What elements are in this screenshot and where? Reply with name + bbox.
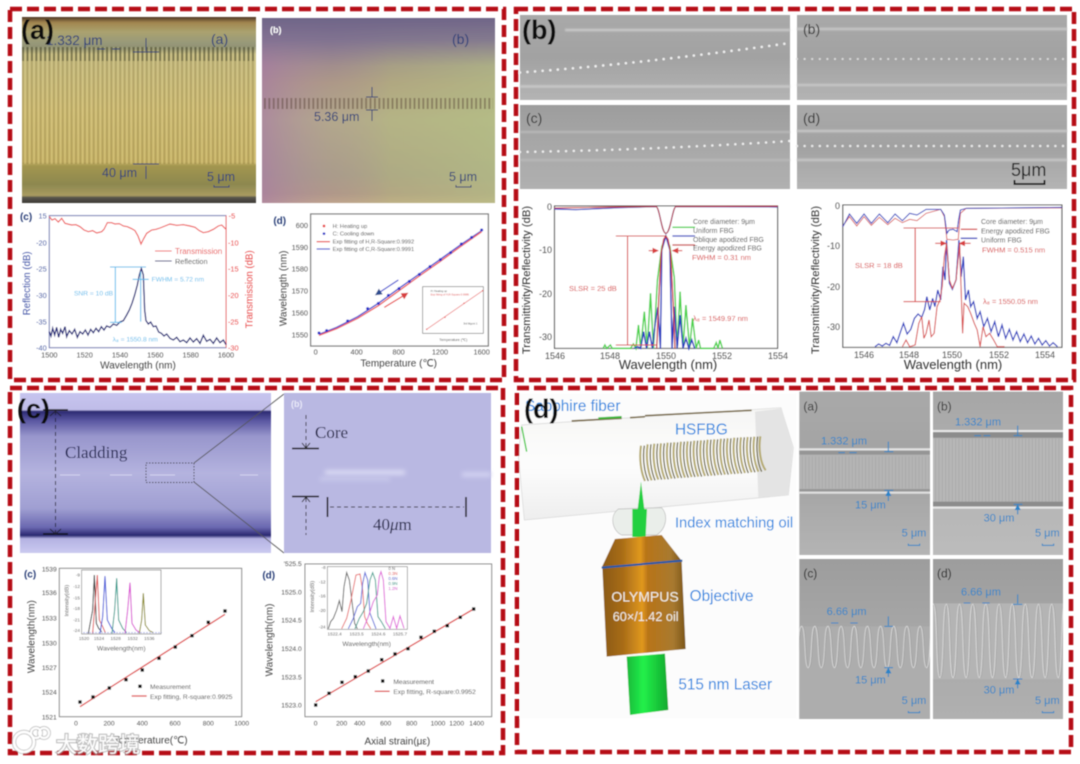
chart: reflection and transmission vs wavelength: 1560	[147, 350, 163, 359]
green focused beam	[632, 482, 647, 537]
chart: apodized FBG spectra, core 9um: Core diameter: 9μm	[693, 219, 755, 226]
chart: reflection and transmission vs wavelength: 1580	[183, 350, 199, 359]
inset: strain spectra: 0.9N	[388, 581, 397, 586]
frame: panel c border	[10, 388, 503, 753]
chart: reflection and transmission vs wavelength: -25	[36, 264, 47, 273]
chart: reflection and transmission vs wavelength: 1500	[41, 350, 57, 359]
SEM: (a) 15 um Type I: 15 μm	[855, 499, 886, 511]
chart: energy apodized vs uniform FBG spectra: 1546	[854, 350, 874, 360]
index matching oil drop	[613, 508, 666, 535]
chart: wavelength vs temperature: 400	[351, 348, 363, 357]
inset: temperature spectra: -15	[73, 595, 80, 600]
chart: wavelength vs temperature with inset: (c)	[24, 569, 36, 580]
inset: temperature spectra: -18	[73, 606, 80, 611]
chart: wavelength vs temperature with inset: 1521	[42, 714, 57, 721]
inset: strain spectra: 1.2N	[388, 586, 397, 591]
inset: strain spectra: 0 N	[388, 566, 395, 571]
chart: apodized FBG spectra, core 9um: 1550	[656, 351, 676, 361]
chart: apodized FBG spectra, core 9um: Transmittivity/Reflectivity (dB)	[521, 206, 533, 354]
chart: energy apodized vs uniform FBG spectra: Core diameter: 9μm	[981, 219, 1043, 226]
micrograph: dots (c): (c)	[526, 110, 542, 126]
chart: wavelength vs axial strain with inset: 600	[380, 721, 392, 728]
diagram: oil-immersion objective writing setup	[518, 393, 797, 718]
SEM: (b) 30 um Type I: (b)	[937, 399, 952, 413]
chart: wavelength vs temperature: Wavelength (nm)	[279, 251, 290, 326]
micrograph: oblique dots	[520, 15, 790, 100]
inset: temperature spectra: -21	[73, 617, 80, 622]
inset: temperature spectra: 1536	[144, 636, 155, 641]
chart: reflection and transmission vs wavelength: 1600	[218, 350, 234, 359]
chart: reflection and transmission vs wavelength: -40	[36, 343, 47, 352]
micrograph: grating 5.36 um: (b)	[452, 31, 469, 47]
chart: wavelength vs temperature: 1590	[292, 243, 308, 252]
frame: panel a border	[10, 9, 504, 380]
chart: reflection and transmission vs wavelength: -20	[228, 291, 239, 300]
chart: energy apodized vs uniform FBG spectra: 1550	[942, 350, 962, 360]
chart: wavelength vs axial strain with inset: Wavelength(nm)	[265, 604, 276, 676]
chart: wavelength vs temperature with inset: Temperature(℃)	[114, 736, 188, 747]
sapphire fiber	[518, 408, 793, 520]
chart: reflection and transmission vs wavelength: Reflection	[175, 257, 208, 266]
chart: energy apodized vs uniform FBG spectra	[810, 201, 1062, 372]
chart: energy apodized vs uniform FBG spectra: Wavelength (nm)	[904, 357, 1002, 372]
micrograph: grating 40 um wide: 40 μm	[102, 166, 137, 180]
chart: wavelength vs temperature with inset: 0	[74, 721, 78, 728]
chart: wavelength vs axial strain with inset: 1400	[469, 721, 484, 728]
inset: strain spectra: -8	[322, 565, 326, 570]
inset: linear fit: H: Heating up	[431, 289, 447, 293]
inset: linear fit: Temperature (℃)	[439, 338, 467, 342]
chart: wavelength vs temperature with inset: 1530	[42, 640, 57, 647]
micrograph: grating 40 um wide	[22, 17, 256, 203]
watermark	[14, 728, 140, 757]
chart: wavelength vs axial strain with inset: '525.5	[284, 561, 302, 568]
setup labels: 515 nm Laser	[678, 677, 772, 694]
inset: strain spectra: -12	[319, 579, 326, 584]
chart: wavelength vs axial strain with inset: 800	[406, 721, 418, 728]
inset: strain spectra: 1525.7	[393, 631, 408, 636]
chart: reflection and transmission vs wavelength: Transmission (dB)	[245, 250, 256, 328]
chart: wavelength vs temperature with inset: 1533	[42, 615, 57, 622]
frame: panel b border	[516, 9, 1074, 380]
chart: wavelength vs axial strain with inset: 1000	[431, 721, 446, 728]
chart: energy apodized vs uniform FBG spectra: -20	[827, 282, 840, 292]
chart: apodized FBG spectra, core 9um: 1546	[545, 351, 565, 361]
chart: wavelength vs axial strain with inset: 400	[354, 721, 366, 728]
chart: wavelength vs temperature: 600	[296, 221, 308, 230]
SEM: (b) 30 um Type I	[933, 392, 1063, 555]
chart: apodized FBG spectra, core 9um: Uniform FBG	[693, 228, 734, 235]
chart: wavelength vs axial strain with inset: 1524.5	[281, 618, 302, 625]
SEM: (a) 15 um Type I: 1.332 μm	[821, 435, 867, 447]
objective: 60×/1.42 oil	[613, 610, 679, 624]
chart: wavelength vs temperature: 1200	[432, 348, 448, 357]
heading: panel a label: (a)	[21, 15, 54, 45]
inset: strain spectra: Wavelength(nm)	[342, 641, 391, 648]
chart: energy apodized vs uniform FBG spectra: 1548	[899, 350, 919, 360]
micrograph: core detail: Core	[315, 423, 348, 442]
SEM: (d) 30 um helical: 5 μm	[1035, 695, 1060, 707]
SEM: (d) 30 um helical: 6.66 μm	[961, 587, 1001, 599]
chart: wavelength vs temperature: Exp fitting of C,R-Square:0.9991	[333, 247, 414, 253]
inset: strain spectra: 0.6N	[388, 576, 397, 581]
inset: linear fit: 3rd Mgcnt 1	[463, 322, 478, 326]
inset: strain spectra: -16	[319, 594, 326, 599]
chart: wavelength vs temperature with inset: 1527	[42, 665, 57, 672]
heading: panel b label: (b)	[522, 15, 556, 45]
chart: reflection and transmission vs wavelength: -10	[228, 238, 239, 247]
chart: wavelength vs axial strain with inset: 1523.0	[281, 703, 302, 710]
chart: wavelength vs temperature with inset: Wavelength(nm)	[26, 600, 37, 673]
SEM: (c) 15 um helical	[799, 559, 930, 719]
setup labels: Sapphire fiber	[525, 398, 620, 415]
inset: temperature spectra: -24	[73, 628, 80, 633]
heading: panel d label: (d)	[524, 394, 558, 424]
chart: reflection and transmission vs wavelength: Wavelength (nm)	[100, 361, 176, 372]
inset: temperature spectra: -12	[73, 584, 80, 589]
chart: wavelength vs temperature with inset: 200	[103, 721, 115, 728]
chart: energy apodized vs uniform FBG spectra: SLSR = 18 dB	[855, 261, 903, 270]
chart: wavelength vs axial strain with inset: 200	[336, 721, 348, 728]
chart: wavelength vs axial strain with inset: 1200	[449, 721, 464, 728]
chart: wavelength vs temperature with inset: 1539	[42, 566, 57, 573]
chart: apodized FBG spectra, core 9um: FWHM = 0.31 nm	[692, 253, 751, 262]
chart: energy apodized vs uniform FBG spectra: Energy apodized FBG	[981, 228, 1050, 236]
inset: strain spectra: Intensity(dB)	[310, 581, 316, 613]
chart: wavelength vs temperature with inset: 400	[137, 721, 148, 728]
inset: strain spectra: 1522.4	[328, 631, 342, 636]
chart: energy apodized vs uniform FBG spectra: 1552	[989, 350, 1009, 360]
chart: wavelength vs temperature with inset: 1000	[234, 721, 249, 728]
chart: wavelength vs axial strain with inset: 0	[314, 721, 318, 728]
inset: linear fit	[423, 287, 483, 342]
micrograph: grating 5.36 um: (b)	[270, 25, 282, 35]
micrograph: cladding overview	[20, 393, 271, 553]
chart: energy apodized vs uniform FBG spectra: -30	[827, 322, 840, 332]
chart: wavelength vs axial strain with inset: 1524.0	[281, 646, 302, 653]
inset: temperature spectra: 1528	[110, 636, 121, 641]
SEM: (c) 15 um helical: (c)	[803, 567, 817, 581]
chart: wavelength vs temperature: Temperature (℃)	[360, 359, 437, 370]
inset: strain spectra: 1523.5	[350, 631, 364, 636]
SEM: (b) 30 um Type I: 30 μm	[984, 513, 1014, 525]
inset: temperature spectra: Wavelength(nm)	[97, 645, 146, 652]
chart: reflection and transmission vs wavelength: Reflection (dB)	[22, 251, 33, 315]
chart: apodized FBG spectra, core 9um: 1548	[600, 351, 620, 361]
inset: temperature spectra: Intensity(dB)	[64, 585, 70, 617]
SEM: (c) 15 um helical: 5 μm	[902, 695, 926, 707]
chart: apodized FBG spectra, core 9um: Oblique apodized FBG	[693, 237, 764, 244]
chart: wavelength vs temperature with inset: 1524	[42, 690, 57, 697]
chart: apodized FBG spectra, core 9um: -30	[539, 332, 552, 342]
chart: wavelength vs temperature: (d)	[273, 216, 286, 227]
chart: apodized FBG spectra, core 9um: 1554	[768, 351, 788, 361]
setup labels: Index matching oil	[675, 516, 793, 532]
SEM: (d) 30 um helical: 30 μm	[984, 684, 1014, 696]
chart: wavelength vs axial strain with inset: Exp fitting, R-square:0.9952	[393, 689, 476, 696]
SEM: (c) 15 um helical: 6.66 μm	[827, 606, 867, 618]
chart: wavelength vs temperature with inset	[24, 566, 249, 747]
micrograph: uniform dots (b): (b)	[803, 21, 820, 37]
helical grating	[640, 436, 766, 481]
chart: wavelength vs temperature: C: Cooling down	[333, 232, 374, 238]
chart: energy apodized vs uniform FBG spectra: FWHM = 0.515 nm	[982, 246, 1045, 254]
chart: reflection and transmission vs wavelength: 1540	[112, 350, 128, 359]
chart: reflection and transmission vs wavelength: -25	[228, 318, 239, 327]
chart: wavelength vs axial strain with inset: 1525.0	[281, 589, 302, 596]
chart: wavelength vs temperature: 0	[314, 348, 318, 357]
setup labels: Objective	[690, 588, 754, 605]
chart: reflection and transmission vs wavelength: -15	[228, 264, 239, 273]
laser tube	[627, 654, 668, 715]
objective	[602, 535, 686, 657]
chart: apodized FBG spectra, core 9um: λ₈ = 1549.97 nm	[693, 314, 748, 323]
chart: energy apodized vs uniform FBG spectra: Transmittivity/Reflectivity (dB)	[810, 206, 822, 354]
chart: energy apodized vs uniform FBG spectra: 1554	[1035, 350, 1055, 360]
chart: apodized FBG spectra, core 9um: 0	[547, 202, 552, 212]
chart: wavelength vs axial strain with inset	[262, 561, 492, 747]
chart: wavelength vs axial strain with inset: 1523.5	[281, 674, 302, 681]
chart: wavelength vs axial strain with inset: (d)	[262, 571, 275, 582]
chart: wavelength vs temperature with inset: Measurement	[150, 684, 191, 691]
chart: wavelength vs axial strain with inset: Measurement	[393, 679, 434, 686]
SEM: (a) 15 um Type I: (a)	[803, 399, 818, 413]
heading: panel c label: (c)	[17, 394, 50, 424]
chart: wavelength vs temperature with inset: 1536	[42, 590, 57, 597]
chart: wavelength vs temperature: Exp fitting of H,R-Square:0.9992	[333, 239, 414, 245]
SEM: (d) 30 um helical	[933, 559, 1063, 719]
chart: apodized FBG spectra, core 9um	[521, 202, 788, 372]
chart: reflection and transmission vs wavelength: -35	[36, 318, 47, 327]
chart: wavelength vs temperature: 1560	[292, 309, 308, 318]
micrograph: core detail: (b)	[291, 399, 302, 409]
inset: strain spectra: -20	[319, 608, 326, 613]
chart: apodized FBG spectra, core 9um: 1552	[712, 351, 732, 361]
watermark: 大数跨境	[56, 734, 140, 757]
micrograph: cladding overview: Cladding	[65, 443, 128, 462]
inset: strain spectra: 0.3N	[388, 571, 397, 576]
chart: wavelength vs temperature: 800	[393, 348, 405, 357]
chart: apodized FBG spectra, core 9um: Wavelength (nm)	[619, 357, 717, 372]
inset: strain spectra	[310, 565, 408, 648]
panel: (d) femtosecond laser setup and SEM images	[518, 392, 1063, 719]
panel: (c) cladding and core images and sensing charts	[20, 393, 492, 747]
chart: energy apodized vs uniform FBG spectra: λ₈ = 1550.05 nm	[983, 297, 1038, 306]
chart: wavelength vs temperature: 1580	[292, 265, 308, 274]
micrograph: grating 40 um wide: (a)	[211, 31, 228, 47]
chart: reflection and transmission vs wavelength: Transmission	[175, 247, 222, 256]
setup labels	[525, 398, 793, 694]
micrograph: dots (d) with scale bar: 5μm	[1011, 160, 1046, 180]
micrograph: uniform dots (b)	[797, 15, 1067, 100]
chart: apodized FBG spectra, core 9um: SLSR = 25 dB	[569, 284, 617, 293]
chart: wavelength vs temperature: H: Heating up	[333, 224, 367, 230]
inset: temperature spectra	[64, 570, 162, 652]
chart: reflection and transmission vs wavelength: 15	[39, 212, 47, 221]
chart: reflection and transmission vs wavelength: FWHM = 5.72 nm	[152, 277, 204, 284]
SEM: (c) 15 um helical: 15 μm	[855, 674, 886, 686]
micrograph: dots (c)	[520, 105, 790, 189]
chart: wavelength vs temperature: 1570	[292, 287, 308, 296]
chart: wavelength vs temperature with inset: Exp fitting, R-square:0.9925	[150, 694, 233, 701]
micrograph: dots (d) with scale bar: (d)	[803, 110, 820, 126]
chart: wavelength vs temperature: 1550	[292, 330, 308, 339]
chart: reflection and transmission vs wavelength: λ₈ = 1550.8 nm	[113, 336, 158, 343]
panel: (a) optical micrographs and spectra	[20, 17, 495, 372]
micrograph: core detail	[284, 393, 491, 553]
micrograph: grating 5.36 um: 5.36 μm	[314, 110, 359, 124]
chart: reflection and transmission vs wavelength: -20	[36, 238, 47, 247]
chart: wavelength vs temperature with inset: 800	[203, 721, 214, 728]
SEM: (b) 30 um Type I: 5 μm	[1035, 528, 1060, 540]
chart: wavelength vs temperature: 1600	[474, 348, 490, 357]
chart: reflection and transmission vs wavelength: (c)	[20, 212, 32, 223]
inset: temperature spectra: 1524	[94, 636, 105, 641]
chart: reflection and transmission vs wavelength: -5	[229, 212, 235, 221]
chart: reflection and transmission vs wavelength	[20, 212, 256, 372]
micrograph: core detail: 40μm	[373, 515, 412, 534]
panel: (b) grating micrographs and spectra	[520, 15, 1067, 372]
zoom lines	[194, 394, 284, 553]
inset: temperature spectra: 1520	[79, 636, 90, 641]
SEM: (d) 30 um helical: (d)	[937, 567, 952, 581]
micrograph: grating 40 um wide: 1.332 μm	[46, 33, 103, 48]
chart: apodized FBG spectra, core 9um: Energy apodized FBG	[693, 246, 762, 252]
micrograph: grating 5.36 um	[262, 18, 495, 203]
chart: reflection and transmission vs wavelength: -30	[36, 291, 47, 300]
chart: reflection and transmission vs wavelength: 1520	[77, 350, 93, 359]
micrograph: grating 40 um wide: 5 μm	[207, 170, 235, 184]
chart: apodized FBG spectra, core 9um: -20	[539, 289, 552, 299]
chart: energy apodized vs uniform FBG spectra: Uniform FBG	[981, 238, 1022, 244]
chart: energy apodized vs uniform FBG spectra: -10	[827, 241, 840, 251]
chart: reflection and transmission vs wavelength: -30	[228, 343, 239, 352]
SEM: (a) 15 um Type I	[799, 392, 930, 555]
chart: wavelength vs axial strain with inset: Axial strain(με)	[364, 736, 430, 747]
chart: wavelength vs temperature	[273, 214, 490, 370]
chart: wavelength vs temperature with inset: 600	[169, 721, 181, 728]
chart: energy apodized vs uniform FBG spectra: 0	[835, 201, 840, 211]
inset: strain spectra: -24	[319, 624, 326, 629]
frame: panel d border	[517, 388, 1071, 752]
chart: reflection and transmission vs wavelength: SNR = 10 dB	[74, 291, 114, 298]
setup labels: HSFBG	[675, 421, 728, 438]
micrograph: dots (d) with scale bar	[797, 105, 1067, 189]
inset: strain spectra: 1524.6	[371, 631, 386, 636]
inset: linear fit: Exp fitting of H,R-Square:0.9986	[431, 293, 469, 297]
SEM: (a) 15 um Type I: 5 μm	[902, 528, 926, 540]
SEM: (b) 30 um Type I: 1.332 μm	[955, 417, 1001, 429]
inset: temperature spectra: -9	[76, 573, 80, 578]
inset: temperature spectra: 1532	[127, 636, 138, 641]
micrograph: grating 5.36 um: 5 μm	[449, 170, 477, 184]
chart: apodized FBG spectra, core 9um: -10	[539, 245, 552, 255]
objective: OLYMPUS	[611, 589, 679, 605]
